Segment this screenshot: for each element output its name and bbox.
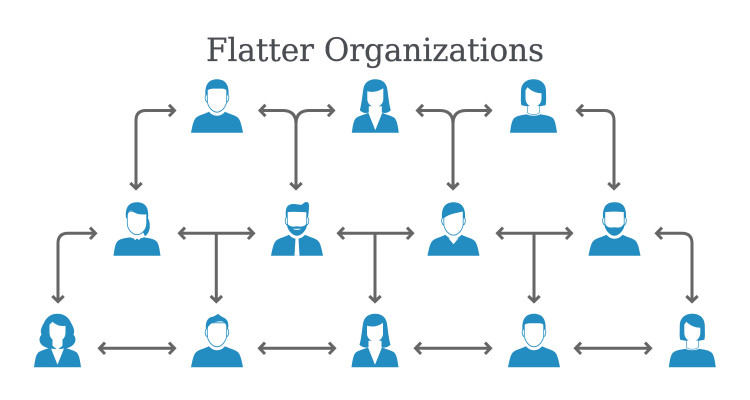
person: bottom row man xyxy=(508,314,560,367)
arrow: bottom four xyxy=(576,343,650,354)
person: top row woman with bob xyxy=(510,79,557,133)
person: bottom row woman with curly hair xyxy=(34,314,81,367)
person: bottom row woman with long hair xyxy=(352,314,398,367)
arrow: bottom one xyxy=(100,343,174,354)
person: top row man xyxy=(191,79,243,133)
person: middle row man with side-swept hair xyxy=(428,202,480,256)
connectors xyxy=(52,105,698,354)
arrow: middle tee one xyxy=(180,228,254,302)
person: bottom row woman with bob xyxy=(669,314,716,367)
arrow: bottom three xyxy=(416,343,490,354)
title: Flatter Organizations xyxy=(206,31,544,69)
arrow: top branching left xyxy=(260,105,334,188)
person: middle row bearded man xyxy=(588,202,640,256)
arrow: middle tee two xyxy=(338,228,412,302)
person: top row woman with long hair xyxy=(352,79,399,133)
arrow: middle left corner xyxy=(52,228,96,302)
person: bottom row man with tufted hair xyxy=(191,314,243,367)
person: middle row man with quiff, beard and tie xyxy=(271,202,323,256)
person: middle row woman with side ponytail xyxy=(114,202,160,256)
arrow: top woman to bearded man xyxy=(578,105,620,188)
arrow: bottom two xyxy=(260,343,334,354)
arrow: middle tee three xyxy=(498,228,572,302)
arrow: top branching right xyxy=(418,105,490,188)
arrow: top man to middle row woman xyxy=(130,105,174,188)
arrow: middle right corner xyxy=(656,228,698,302)
